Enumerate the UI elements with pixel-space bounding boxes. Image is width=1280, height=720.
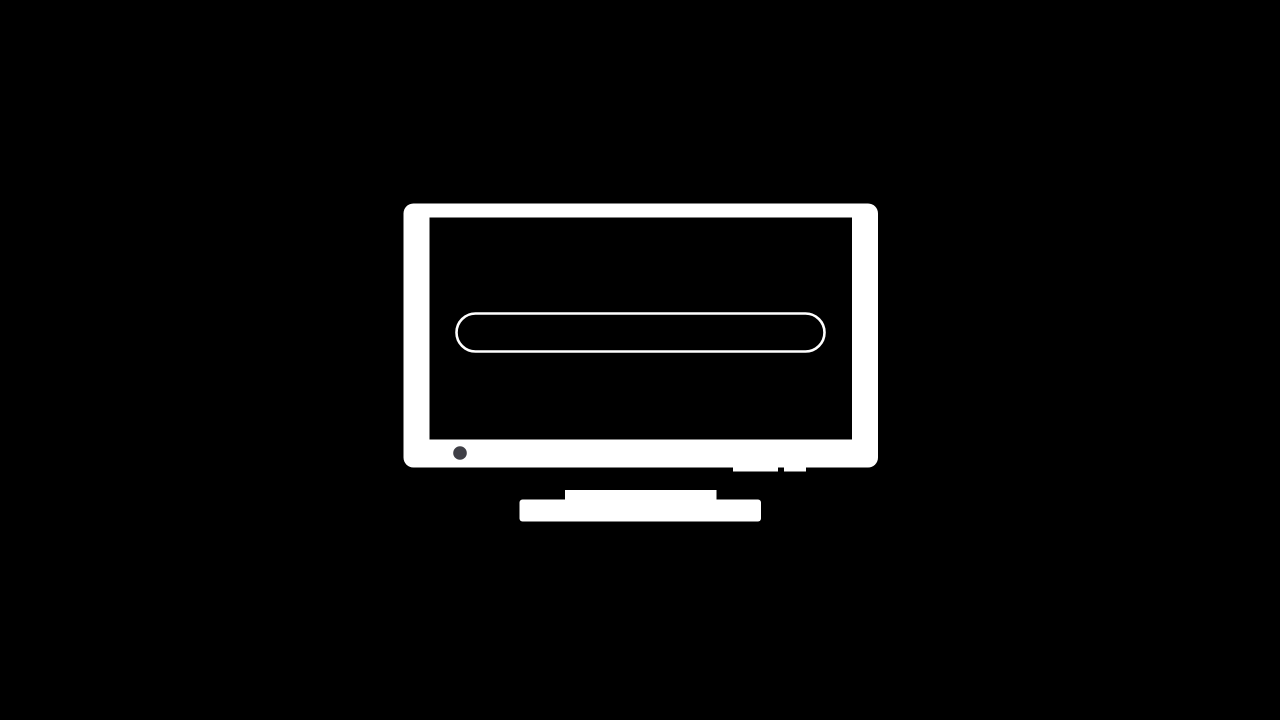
loading bar outline [456, 314, 824, 352]
stand base [520, 500, 761, 522]
monitor screen [430, 218, 852, 440]
stand neck [565, 490, 716, 502]
monitor stand [520, 490, 761, 522]
bottom button left [733, 467, 778, 472]
bottom button right [784, 467, 806, 472]
monitor frame [404, 204, 878, 468]
monitor body [404, 204, 878, 472]
power indicator dot [453, 446, 467, 460]
